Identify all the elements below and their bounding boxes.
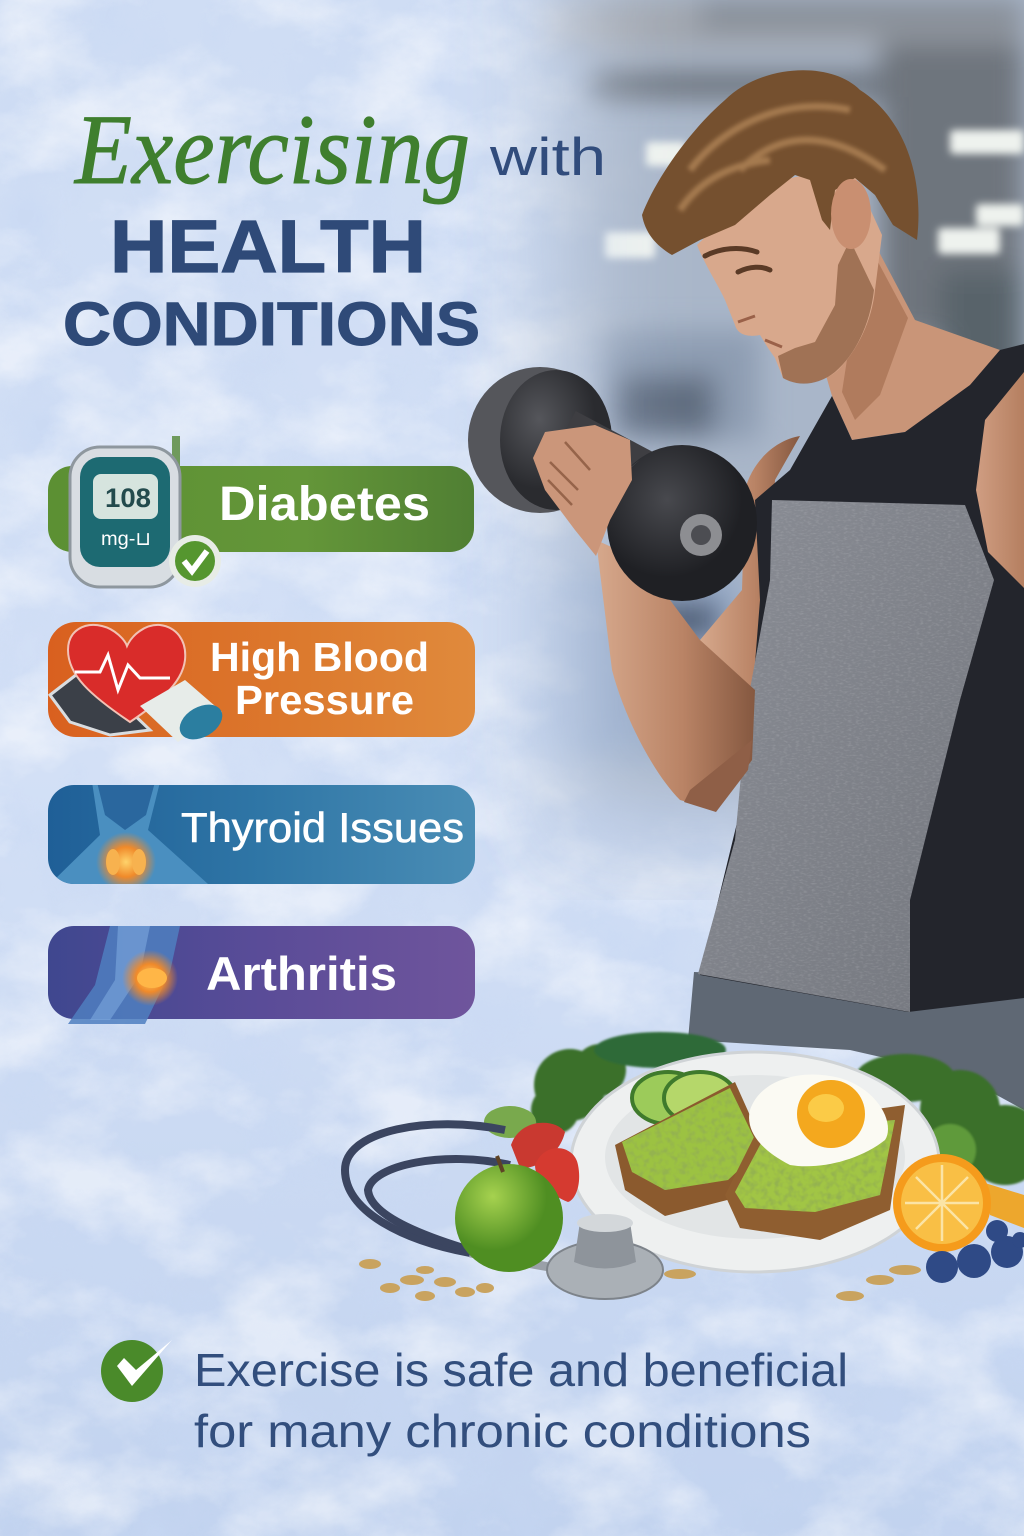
pill: high blood pressure — [48, 622, 475, 746]
callout — [101, 1340, 848, 1457]
icon: glucose meter: mg-⊔ — [101, 529, 151, 550]
hand — [533, 425, 632, 556]
hair — [642, 70, 918, 255]
gym backdrop — [506, 0, 1024, 886]
title: CONDITIONS — [63, 290, 480, 358]
ear — [831, 179, 871, 249]
icon: heart and cuff — [50, 625, 228, 746]
shorts — [688, 972, 1024, 1110]
apple — [455, 1164, 563, 1272]
shirt dark — [700, 344, 1024, 1012]
icon: check mark — [101, 1340, 172, 1402]
man — [468, 70, 1024, 1110]
shirt grey panel — [698, 500, 994, 1012]
neck and chest — [825, 250, 1000, 440]
callout: for many chronic conditions — [194, 1405, 811, 1457]
pill: arthritis — [48, 926, 475, 1024]
pill: high blood pressure: High Blood — [210, 634, 429, 680]
beard — [778, 240, 874, 384]
broccoli and greens — [484, 1032, 1024, 1185]
icon: knee joint — [68, 926, 180, 1024]
pill: high blood pressure: Pressure — [235, 677, 414, 723]
food group — [345, 1032, 1024, 1301]
seeds — [359, 1259, 921, 1301]
pill: diabetes — [48, 436, 474, 587]
title: HEALTH — [110, 205, 426, 288]
pill: thyroid issues — [48, 782, 475, 892]
dumbbell — [468, 367, 757, 601]
head — [697, 165, 882, 383]
far shoulder and arm — [972, 345, 1024, 590]
callout: Exercise is safe and beneficial — [194, 1344, 848, 1396]
plate — [571, 1052, 939, 1272]
orange — [985, 1183, 1024, 1228]
pill: arthritis: Arthritis — [206, 947, 397, 1000]
strawberries — [511, 1123, 565, 1168]
near shoulder — [700, 436, 800, 720]
brow and eye — [705, 249, 770, 272]
pill: diabetes: Diabetes — [219, 478, 430, 531]
cucumber — [632, 1072, 704, 1124]
blueberries — [926, 1220, 1024, 1283]
title: Exercising — [73, 94, 470, 205]
title — [63, 94, 606, 358]
stethoscope chest piece — [547, 1241, 663, 1299]
egg — [749, 1075, 888, 1166]
icon: glucose meter — [70, 436, 221, 587]
pill: thyroid issues: Thyroid Issues — [181, 804, 464, 851]
stethoscope — [345, 1124, 555, 1268]
title: with — [489, 128, 606, 187]
toast right — [725, 1105, 905, 1240]
icon: glucose meter: 108 — [105, 483, 151, 513]
icon: thyroid figure — [57, 785, 208, 884]
toast left — [615, 1082, 770, 1216]
forearm — [596, 540, 755, 810]
